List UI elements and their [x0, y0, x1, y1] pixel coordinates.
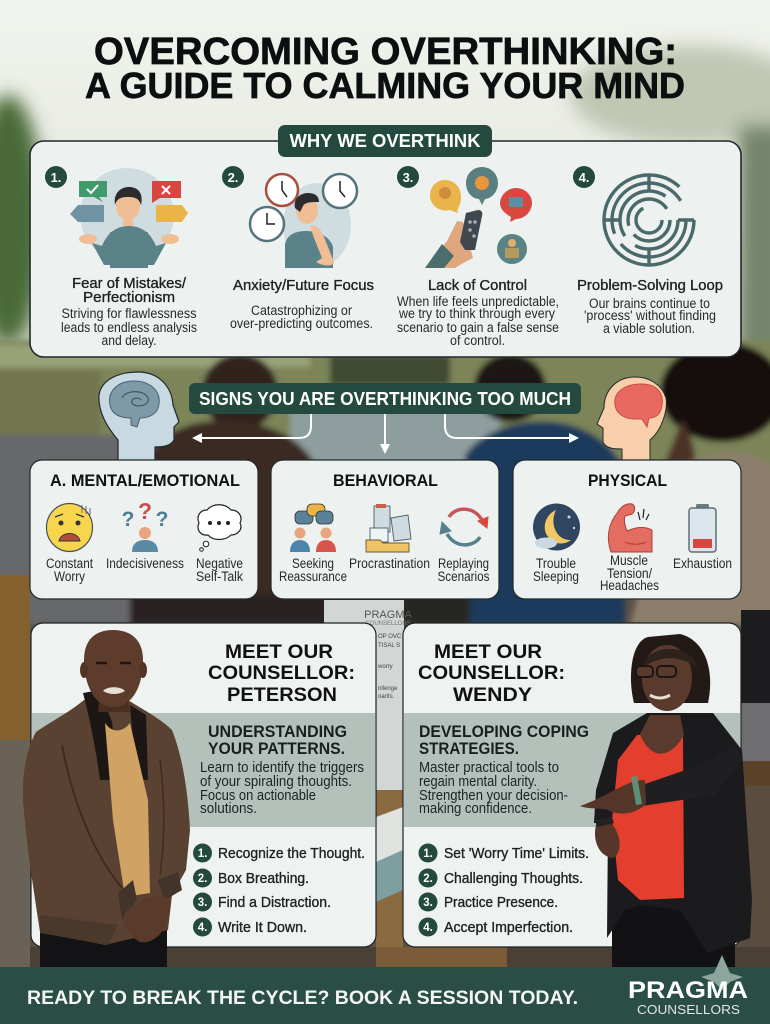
numbered list: peterson: 3. — [198, 897, 207, 909]
subheading and description: of your spiraling thoughts. — [200, 774, 352, 790]
numbered list: wendy: Challenging Thoughts. — [444, 871, 583, 887]
panel: behavioral — [271, 460, 499, 599]
item 3: lack of control — [397, 166, 559, 348]
background brochure text: PRAGMA — [364, 609, 412, 621]
label: exhaustion: Exhaustion — [673, 556, 732, 571]
arrow: to physical panel — [445, 414, 579, 443]
number badge 1: 1. — [51, 170, 61, 185]
label: negative self-talk: Self-Talk — [196, 569, 243, 584]
photo: peterson — [23, 630, 190, 967]
heading: meet wendy: MEET OUR — [434, 642, 542, 663]
text: anxiety: over-predicting outcomes. — [230, 316, 373, 331]
background brochure text: worry — [377, 664, 393, 670]
heading: meet peterson: MEET OUR — [225, 642, 333, 663]
number badge 4: 4. — [579, 170, 589, 185]
subheading and description: DEVELOPING COPING — [419, 723, 589, 741]
item 1: fear of mistakes — [45, 166, 197, 348]
label: muscle tension — [600, 553, 659, 593]
background brochure text — [364, 609, 412, 700]
numbered list: peterson: Recognize the Thought. — [218, 846, 365, 862]
icon: question marks over person: ? — [122, 508, 134, 531]
icon: circular maze — [604, 175, 694, 265]
numbered list: wendy: Set 'Worry Time' Limits. — [444, 846, 589, 862]
subheading and description: UNDERSTANDING — [208, 723, 347, 741]
heading: physical: PHYSICAL — [588, 472, 667, 490]
logo: pragma counsellors — [628, 977, 748, 1017]
text: lack of control — [397, 278, 559, 348]
icon: hand with remote and bubbles — [425, 167, 532, 268]
numbered list: wendy: 2. — [423, 873, 433, 885]
title: OVERCOMING OVERTHINKING: — [94, 31, 677, 73]
numbered list: wendy: Accept Imperfection. — [444, 920, 573, 936]
heading badge: signs you are overthinking: SIGNS YOU ARE OVERTHINKING TOO MUCH — [199, 389, 571, 409]
numbered list: wendy: Practice Presence. — [444, 895, 558, 911]
text: anxiety: Catastrophizing or — [251, 303, 352, 318]
number badge 3 — [397, 166, 419, 188]
title: A GUIDE TO CALMING YOUR MIND — [85, 65, 685, 106]
label: negative self-talk: Negative — [196, 556, 243, 571]
item 2: anxiety — [222, 166, 374, 331]
numbered list: peterson: 1. — [198, 848, 207, 860]
subheading and description: solutions. — [200, 801, 257, 817]
heading: meet peterson: COUNSELLOR: — [208, 663, 355, 684]
text: lack of control: we try to think through every — [398, 306, 555, 321]
text: problem-solving loop — [577, 278, 723, 336]
number badge 4 — [573, 166, 595, 188]
icon: low battery — [689, 504, 716, 552]
label: muscle tension: Muscle — [610, 553, 648, 568]
icon: moon and cloud — [533, 504, 580, 550]
text: lack of control: When life feels unpredictable, — [397, 294, 559, 309]
text: problem-solving loop: Our brains continue to — [589, 296, 710, 311]
label: seeking reassurance: Reassurance — [279, 569, 347, 584]
footer banner — [0, 955, 770, 1024]
background brochure text: TISAL S — [378, 643, 400, 649]
item 4: problem-solving loop — [573, 166, 723, 336]
numbered list: wendy: 3. — [423, 897, 433, 909]
icon: flexed muscle — [608, 504, 652, 552]
heading: meet wendy: WENDY — [453, 685, 532, 706]
icon: question marks over person — [122, 498, 168, 552]
label: constant worry: Worry — [54, 569, 85, 584]
number badge 3: 3. — [403, 170, 413, 185]
text: problem-solving loop: a viable solution. — [603, 321, 695, 336]
text: lack of control: scenario to gain a false sense — [397, 320, 559, 335]
title — [85, 31, 685, 106]
heading: mental/emotional: A. MENTAL/EMOTIONAL — [50, 472, 240, 490]
icon: seeking reassurance people — [290, 504, 336, 552]
label: trouble sleeping: Sleeping — [533, 569, 579, 584]
icon: folders and papers — [366, 504, 411, 552]
subheading and description: Focus on actionable — [200, 788, 316, 804]
label: trouble sleeping: Trouble — [536, 556, 576, 571]
panel: counsellor wendy — [403, 623, 741, 947]
text: problem-solving loop: 'process' without finding — [584, 308, 716, 323]
label: seeking reassurance: Seeking — [292, 556, 334, 571]
panel: counsellor peterson — [31, 623, 376, 947]
label: replaying scenarios — [438, 556, 490, 584]
photo: wendy — [580, 634, 752, 967]
numbered list: peterson: Find a Distraction. — [218, 895, 331, 911]
subheading and description: Learn to identify the triggers — [200, 760, 364, 776]
numbered list: peterson: 4. — [198, 922, 207, 934]
label: muscle tension: Headaches — [600, 578, 659, 593]
text: problem-solving loop: Problem-Solving Loop — [577, 278, 723, 294]
background brochure text: OP OVC — [378, 634, 402, 640]
icon: person with choices — [70, 168, 188, 268]
number badge 2 — [222, 166, 244, 188]
numbered list: peterson: Box Breathing. — [218, 871, 309, 887]
subheading and description — [419, 723, 589, 817]
heading badge: why we overthink: WHY WE OVERTHINK — [290, 131, 480, 151]
subheading and description: making confidence. — [419, 801, 532, 817]
band: understanding your patterns — [32, 713, 375, 827]
subheading and description — [200, 723, 364, 817]
icon: replay cycle arrows — [440, 509, 488, 545]
heading: behavioral: BEHAVIORAL — [333, 472, 438, 490]
subheading and description: Strengthen your decision- — [419, 788, 568, 804]
icon: negative thought bubble — [198, 505, 241, 551]
band: developing coping strategies — [404, 713, 740, 827]
panel: mental/emotional — [30, 460, 258, 599]
heading: meet wendy: COUNSELLOR: — [418, 663, 565, 684]
heading badge: why we overthink — [278, 125, 492, 157]
numbered list: wendy: 4. — [423, 922, 433, 934]
label: negative self-talk — [196, 556, 243, 584]
call to action text: READY TO BREAK THE CYCLE? BOOK A SESSION TODAY. — [27, 988, 578, 1009]
numbered list: peterson: 2. — [198, 873, 207, 885]
label: replaying scenarios: Replaying — [438, 556, 489, 571]
panel: why we overthink — [30, 125, 741, 357]
label: replaying scenarios: Scenarios — [438, 569, 490, 584]
number badge 1 — [45, 166, 67, 188]
arrow: to behavioral panel — [380, 414, 390, 454]
text: lack of control: of control. — [450, 333, 505, 348]
icon: question marks over person: ? — [156, 508, 168, 531]
subheading and description: Master practical tools to — [419, 760, 559, 776]
subheading and description: STRATEGIES. — [419, 740, 519, 758]
label: constant worry: Constant — [46, 556, 93, 571]
numbered list: peterson — [193, 844, 365, 936]
text: fear of mistakes: Fear of Mistakes/ — [72, 276, 187, 292]
numbered list: wendy: 1. — [423, 848, 433, 860]
icon: worried face — [46, 504, 92, 552]
logo: pragma counsellors: PRAGMA — [628, 977, 748, 1004]
arrow: to mental panel — [192, 414, 311, 443]
text: lack of control: Lack of Control — [428, 278, 527, 294]
icon: question marks over person: ? — [138, 498, 152, 524]
heading: meet wendy — [418, 642, 565, 706]
logo: pragma counsellors: COUNSELLORS — [637, 1002, 740, 1017]
icon: right head with red brain — [597, 377, 666, 462]
text: anxiety: Anxiety/Future Focus — [233, 278, 374, 294]
number badge 2: 2. — [228, 170, 238, 185]
text: anxiety — [230, 278, 374, 331]
label: trouble sleeping — [533, 556, 579, 584]
background brochure text: COUNSELLORS — [365, 621, 411, 627]
text: fear of mistakes — [61, 276, 197, 348]
heading: meet peterson — [208, 642, 355, 706]
subheading and description: regain mental clarity. — [419, 774, 537, 790]
logo star — [701, 955, 743, 990]
icon: person and clocks — [250, 174, 357, 268]
text: fear of mistakes: Perfectionism — [83, 290, 175, 306]
icon: left head with tangled brain — [99, 372, 179, 462]
text: fear of mistakes: leads to endless analysis — [61, 320, 197, 335]
label: constant worry — [46, 556, 93, 584]
label: seeking reassurance — [279, 556, 347, 584]
text: fear of mistakes: Striving for flawlessness — [62, 306, 197, 321]
panel: physical — [513, 460, 741, 599]
text: fear of mistakes: and delay. — [102, 333, 156, 348]
numbered list: wendy — [418, 844, 589, 936]
label: muscle tension: Tension/ — [607, 566, 652, 581]
label: procrastination: Procrastination — [349, 556, 430, 571]
numbered list: peterson: Write It Down. — [218, 920, 307, 936]
background brochure text: nllenge — [378, 686, 398, 692]
subheading and description: YOUR PATTERNS. — [208, 740, 345, 758]
background brochure text: oarits. — [378, 694, 395, 700]
heading: meet peterson: PETERSON — [227, 685, 337, 706]
heading badge: signs you are overthinking — [189, 383, 581, 414]
label: indecisiveness: Indecisiveness — [106, 556, 184, 571]
